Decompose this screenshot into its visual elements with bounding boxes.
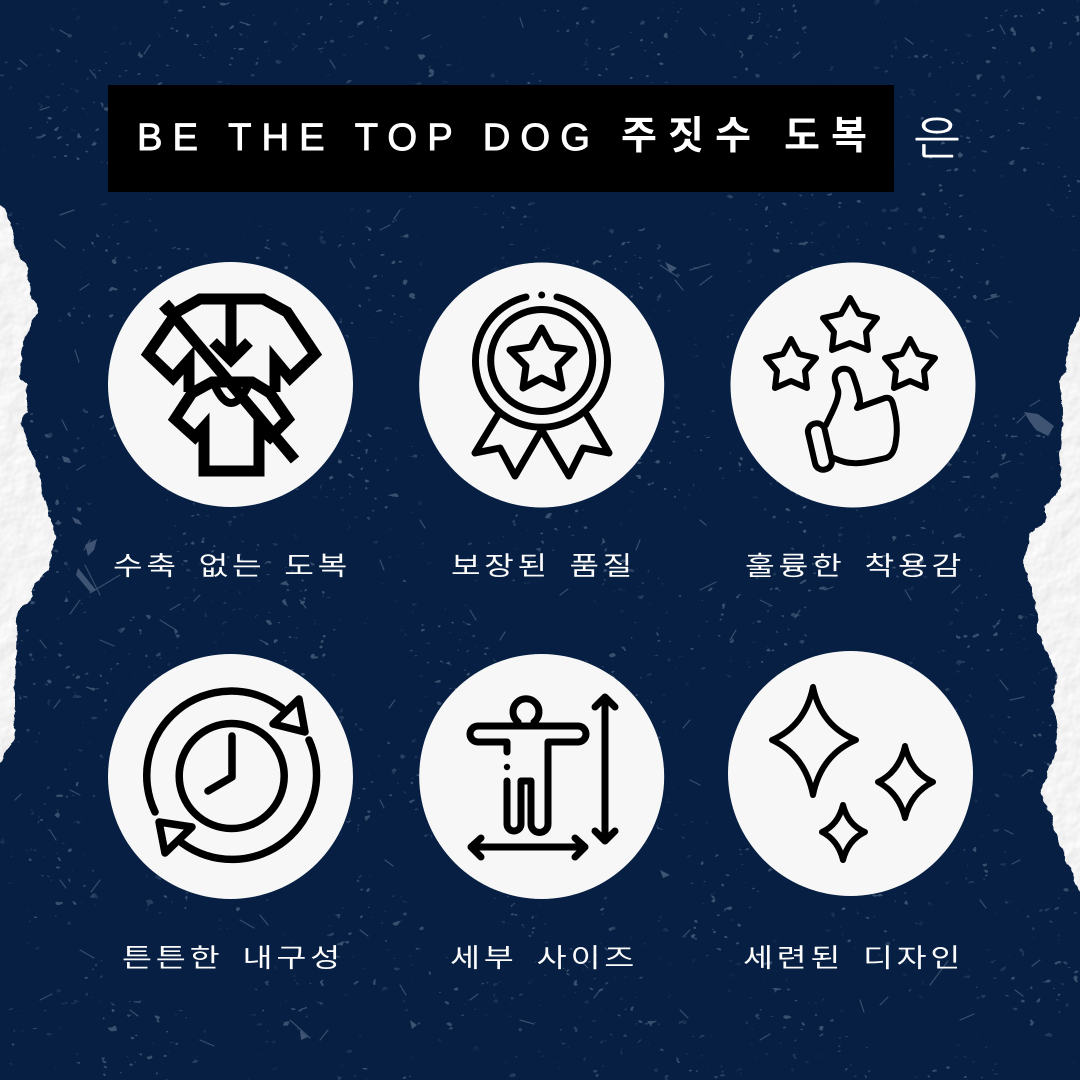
icon: medal xyxy=(475,292,609,476)
circle xyxy=(108,654,353,899)
panel: detailed sizes xyxy=(419,654,664,973)
panel: great fit xyxy=(730,262,976,581)
label: 보장된 품질 xyxy=(451,551,636,581)
label: 훌륭한 착용감 xyxy=(745,551,965,581)
circle xyxy=(730,262,976,508)
background blots xyxy=(62,262,1054,1040)
icon: shirts crossed out xyxy=(148,298,315,471)
title text: korean: 주짓수 도복 xyxy=(621,115,867,158)
torn paper: right edge xyxy=(1023,305,1080,905)
title xyxy=(108,85,960,192)
circle xyxy=(419,262,664,508)
circle xyxy=(108,262,353,507)
icon: clock with cycle arrows xyxy=(147,691,317,859)
panel: no shrinkage xyxy=(108,262,353,581)
title text: latin: BE THE TOP DOG xyxy=(137,117,600,159)
label: 튼튼한 내구성 xyxy=(122,943,344,973)
panel: durability xyxy=(108,654,353,973)
label: 세련된 디자인 xyxy=(743,943,964,973)
icon: thumbs up with stars xyxy=(766,298,935,471)
panel: refined design xyxy=(728,651,973,973)
label: 세부 사이즈 xyxy=(450,943,638,973)
title suffix: 은 xyxy=(914,113,960,164)
icon: sparkles xyxy=(772,687,933,860)
circle xyxy=(728,651,973,896)
icon: body measurements xyxy=(470,697,615,857)
panel: guaranteed quality xyxy=(419,262,664,581)
circle xyxy=(419,654,664,899)
label: 수축 없는 도복 xyxy=(113,551,351,581)
title banner xyxy=(108,85,894,192)
torn paper: left edge xyxy=(0,195,55,775)
